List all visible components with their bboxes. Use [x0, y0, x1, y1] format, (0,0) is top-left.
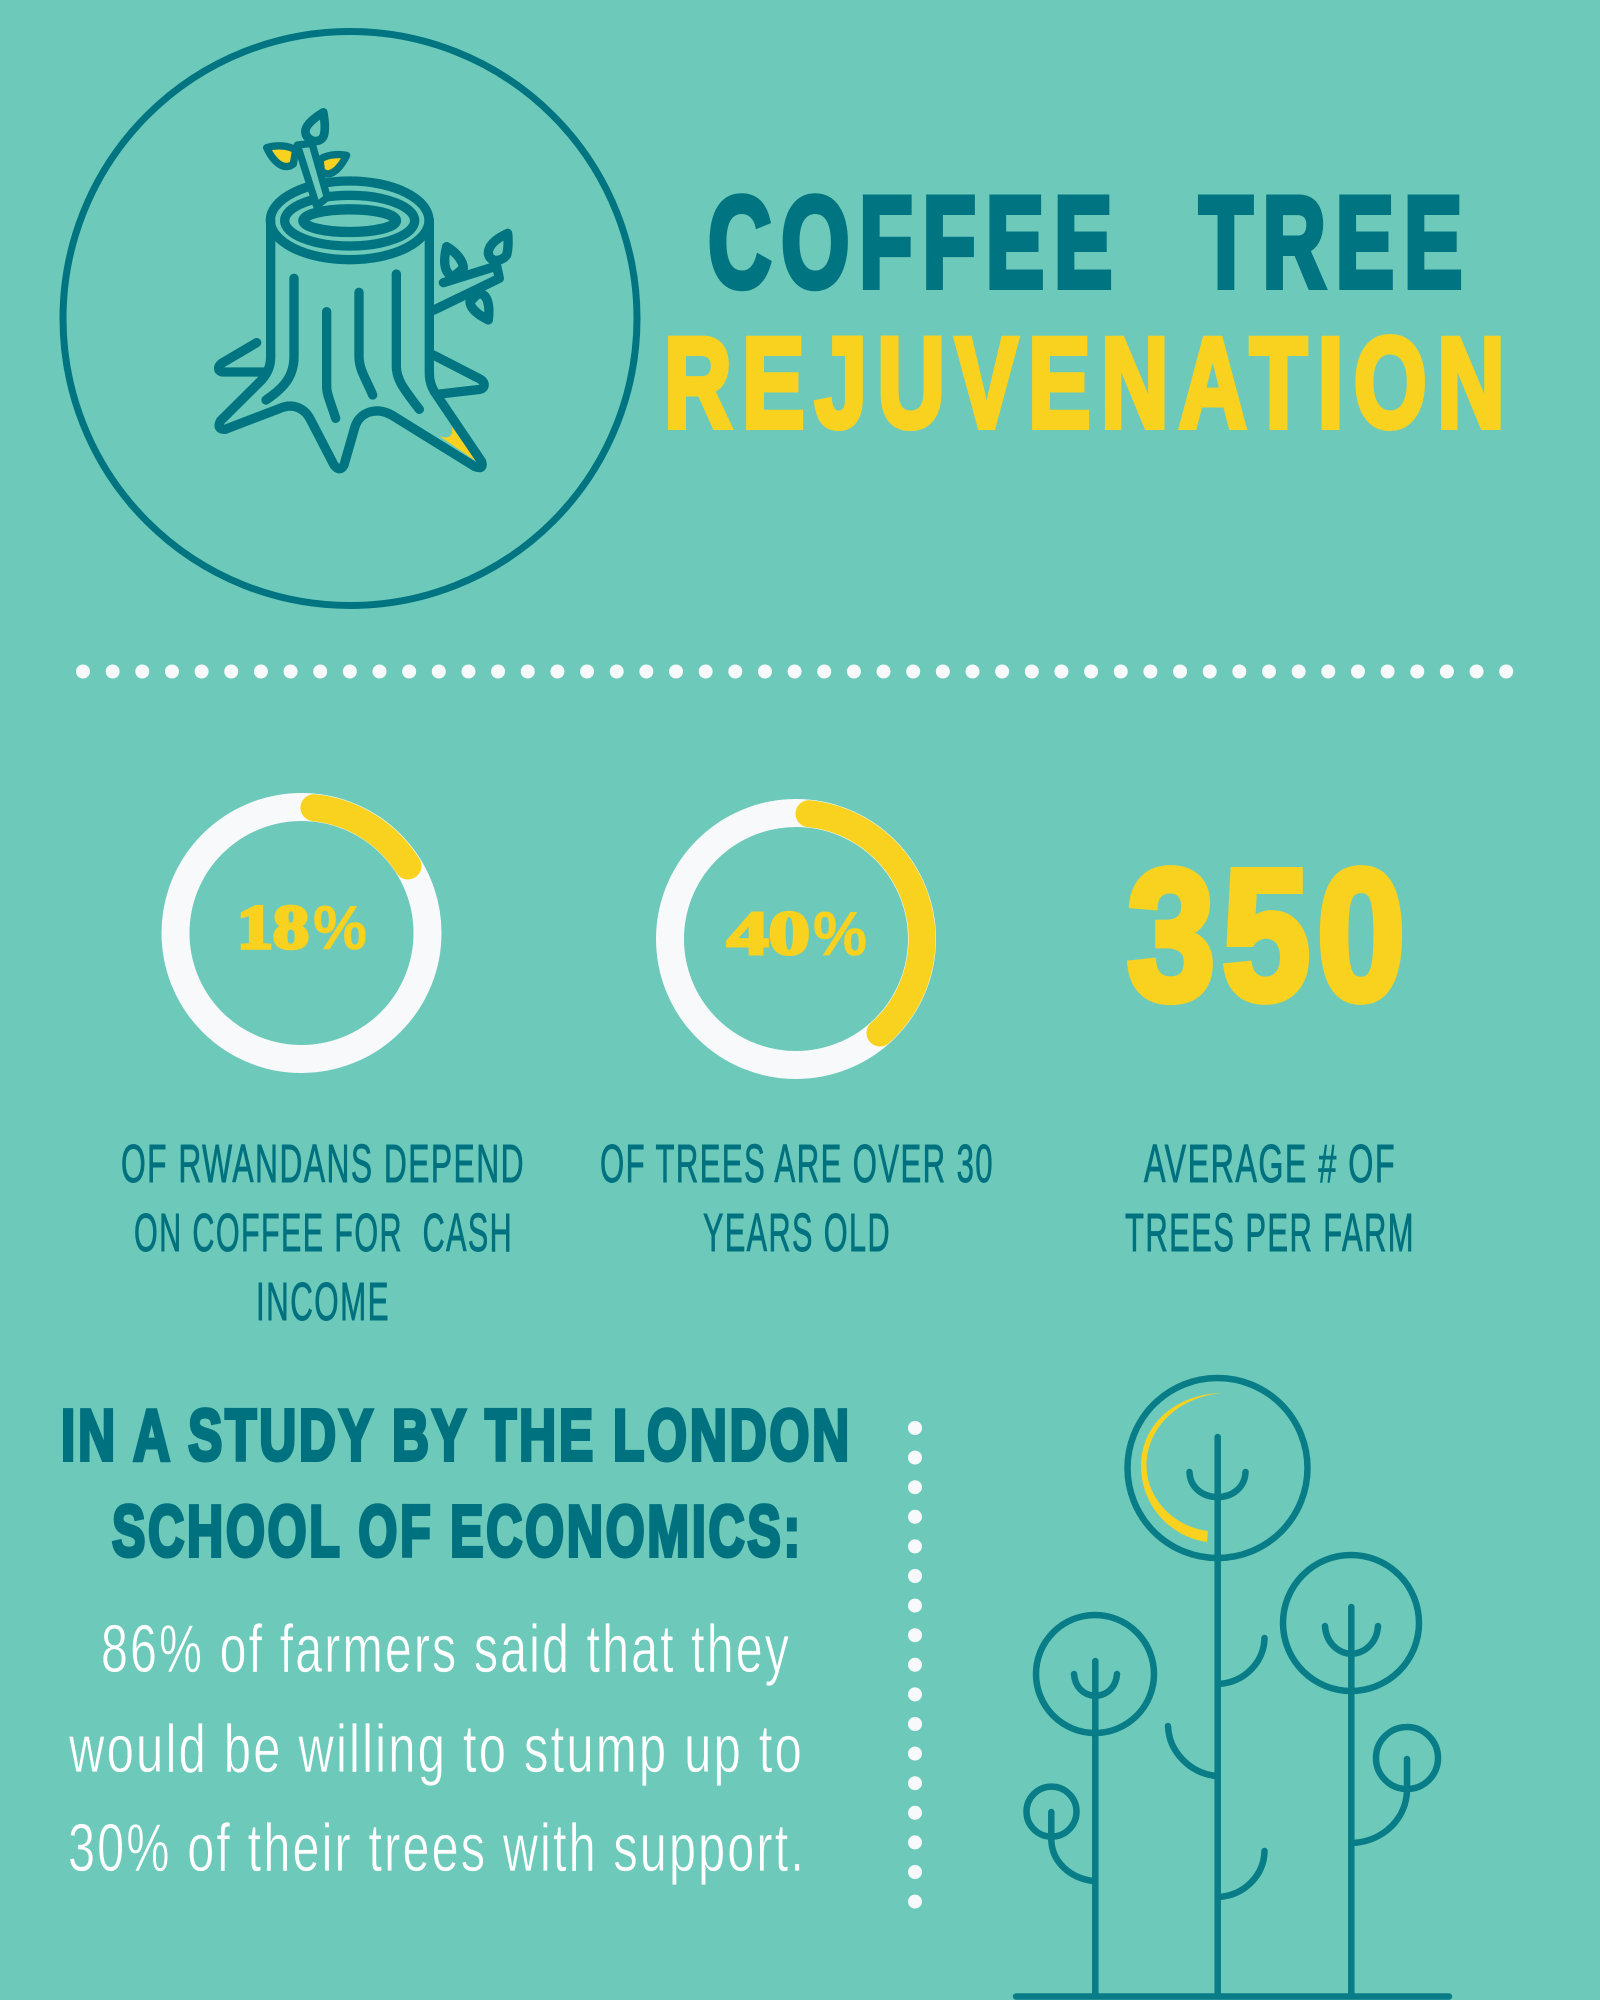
donut chart: 40% [670, 813, 922, 1065]
donut chart: 18% [176, 807, 428, 1059]
stat label: Rwandans: OF RWANDANS DEPEND [121, 1134, 525, 1194]
body text: 30% of their trees with support. [68, 1810, 806, 1886]
donut chart: 40%: 40 [727, 900, 810, 968]
stat label: tree age [600, 1134, 994, 1263]
stat label: trees per farm [1125, 1134, 1415, 1263]
body text [68, 1611, 806, 1886]
heading: study: IN A STUDY BY THE LONDON [61, 1396, 852, 1476]
stat label: Rwandans: ON COFFEE FOR CASH [134, 1203, 513, 1263]
stat label: trees per farm: AVERAGE # OF [1144, 1134, 1396, 1194]
body text: would be willing to stump up to [68, 1711, 804, 1787]
body text: 86% of farmers said that they [101, 1611, 791, 1687]
heading: study: SCHOOL OF ECONOMICS: [112, 1492, 803, 1572]
stat label: Rwandans [121, 1134, 525, 1332]
icon: tree stump in circle [63, 32, 637, 606]
heading: study [61, 1396, 852, 1572]
big number: 350: 350 [1127, 832, 1412, 1039]
stat label: tree age: YEARS OLD [703, 1203, 891, 1263]
stat label: Rwandans: INCOME [256, 1272, 390, 1332]
stat label: tree age: OF TREES ARE OVER 30 [600, 1134, 994, 1194]
donut chart: 18%: 18 [237, 894, 309, 962]
donut chart: 18%: % [313, 894, 367, 963]
donut chart: 40%: % [813, 900, 867, 969]
title [664, 169, 1515, 455]
title: COFFEE [708, 169, 1122, 315]
icon: stylised trees [1016, 1378, 1449, 1996]
title: TREE [1199, 169, 1472, 315]
